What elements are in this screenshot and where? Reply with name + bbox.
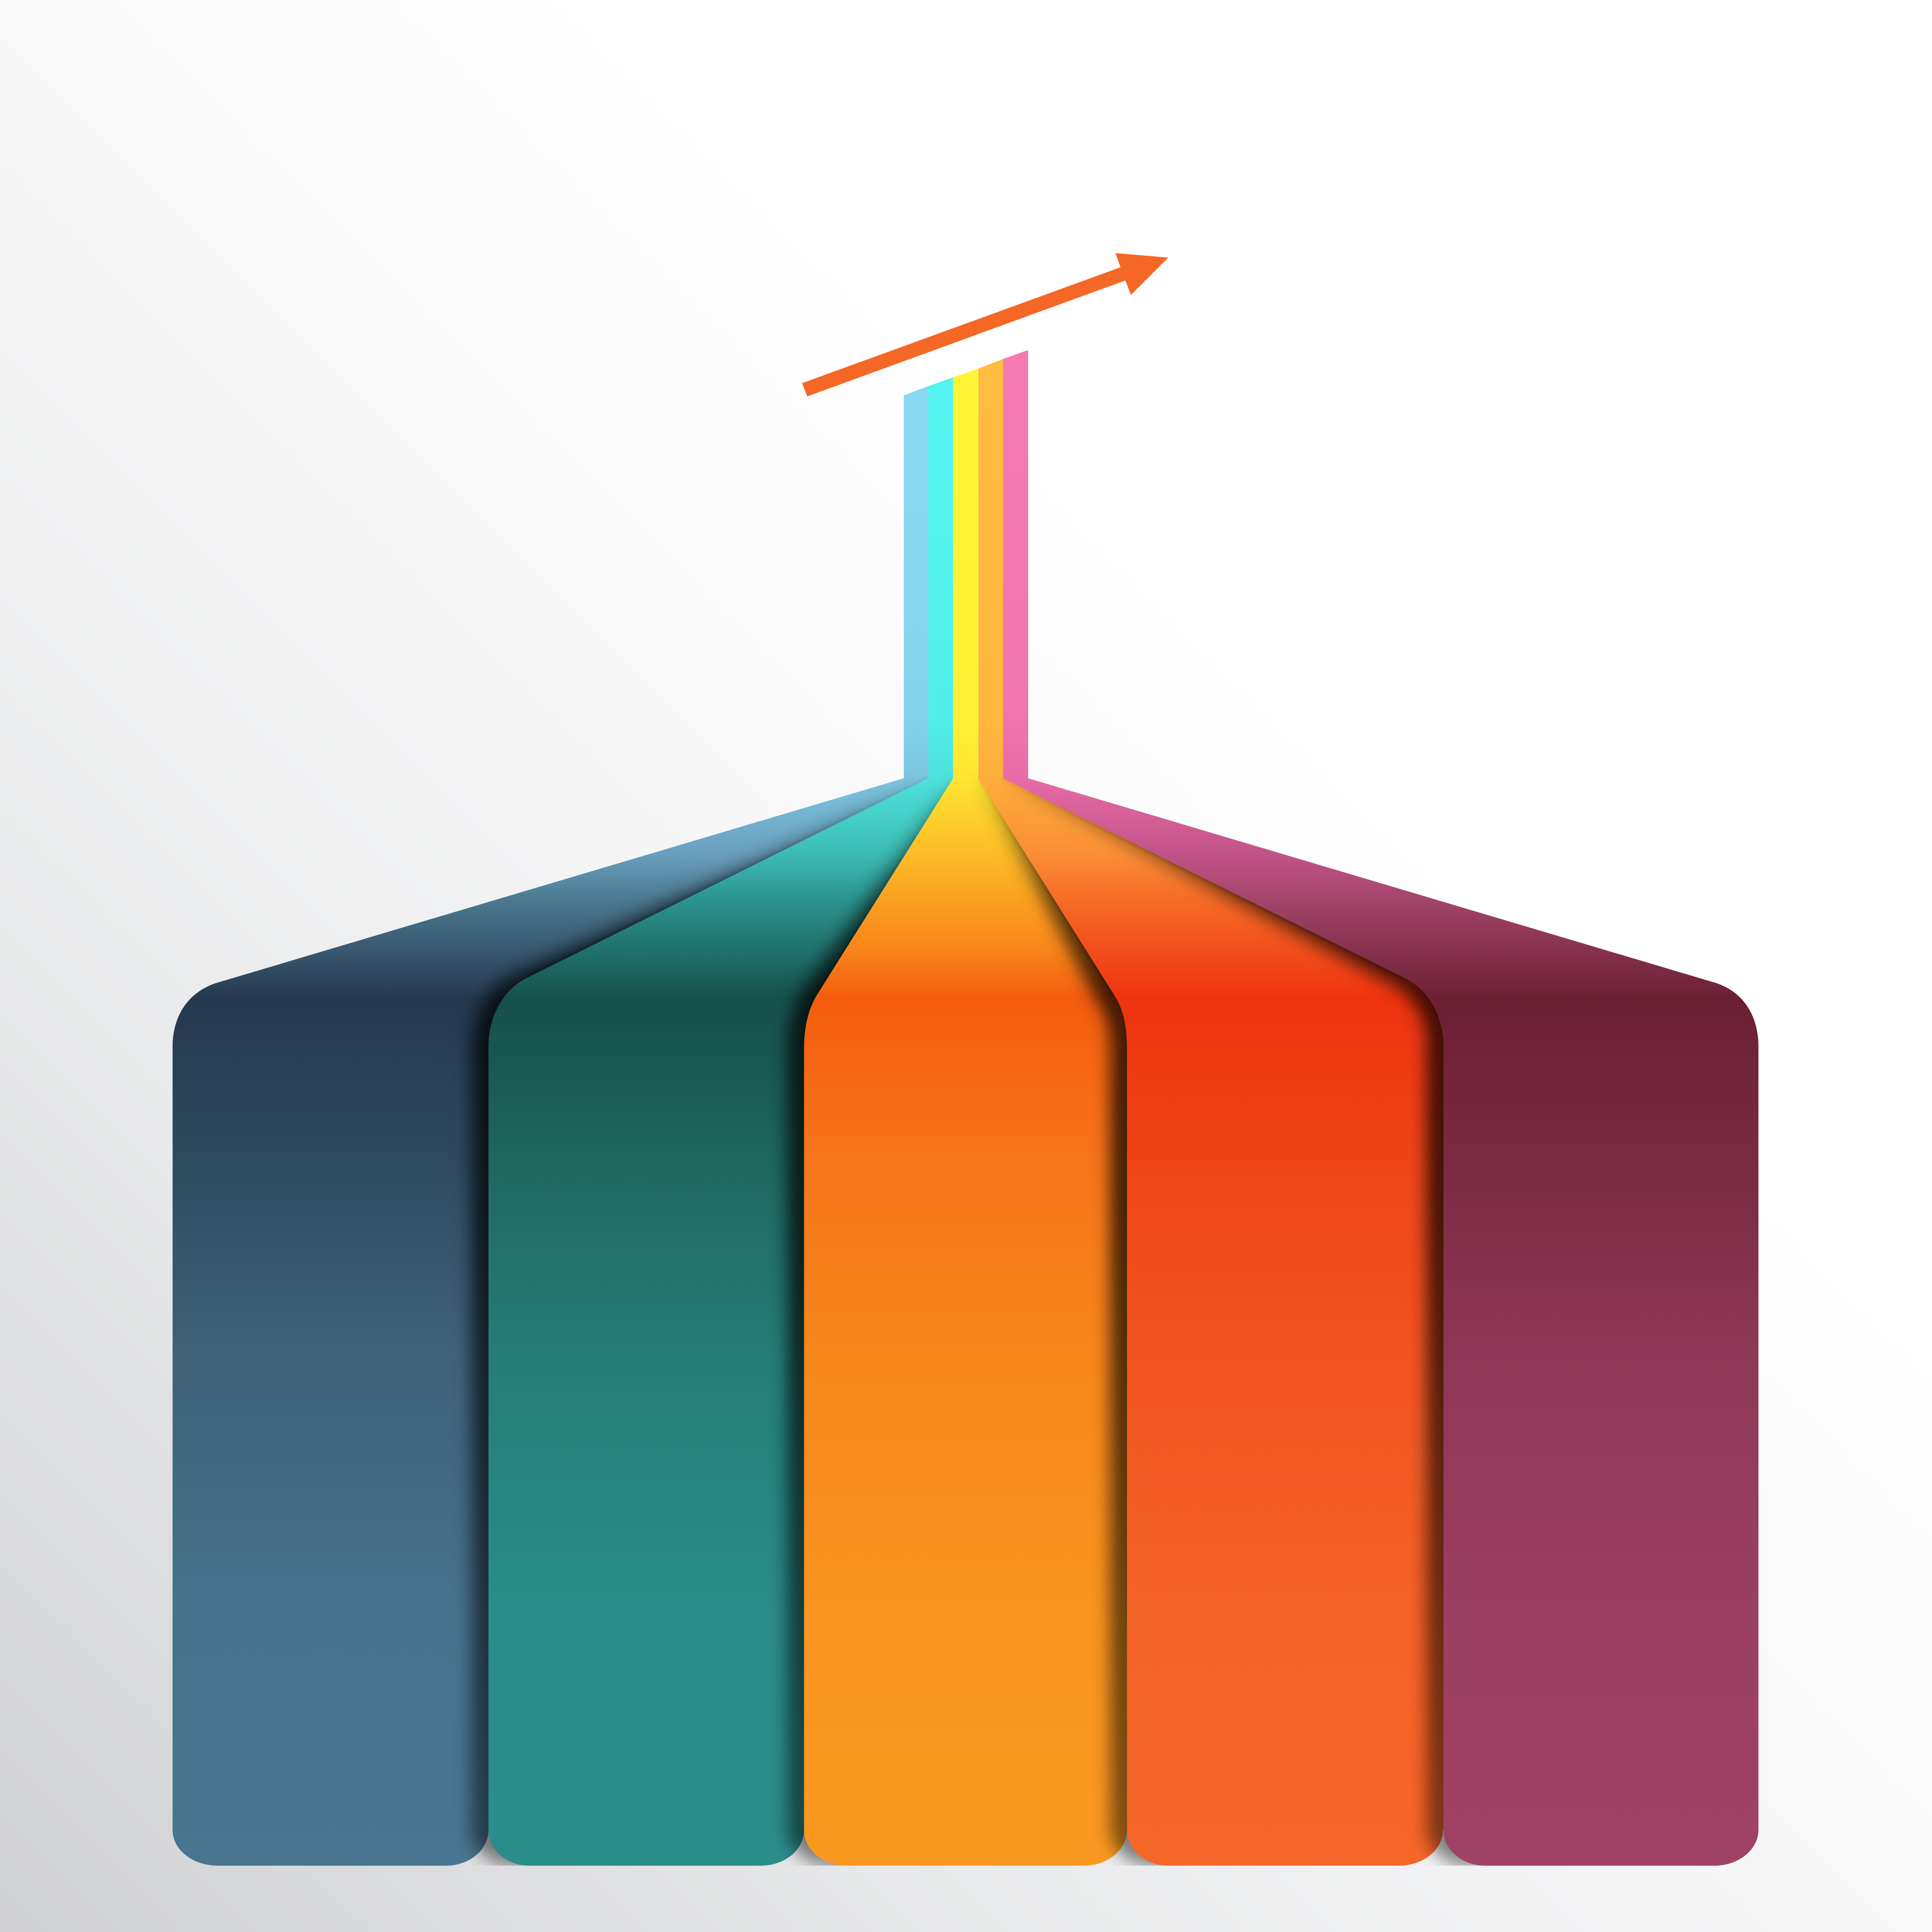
panel 3: orange band bbox=[804, 369, 1132, 1866]
panel 5: purple band bbox=[1003, 350, 1759, 1866]
panel 1: blue band bbox=[173, 386, 929, 1866]
shadow of red band on orange band bbox=[978, 778, 1191, 1866]
shadow of orange band on teal band bbox=[787, 778, 953, 1866]
shadow of purple band on red-orange band bbox=[1003, 778, 1514, 1866]
arrow: orange upward arrow bbox=[802, 253, 1168, 396]
panel 2: teal band bbox=[488, 378, 953, 1866]
shadow of teal band on blue band bbox=[472, 778, 928, 1866]
panel 4: red-orange band bbox=[978, 359, 1452, 1866]
